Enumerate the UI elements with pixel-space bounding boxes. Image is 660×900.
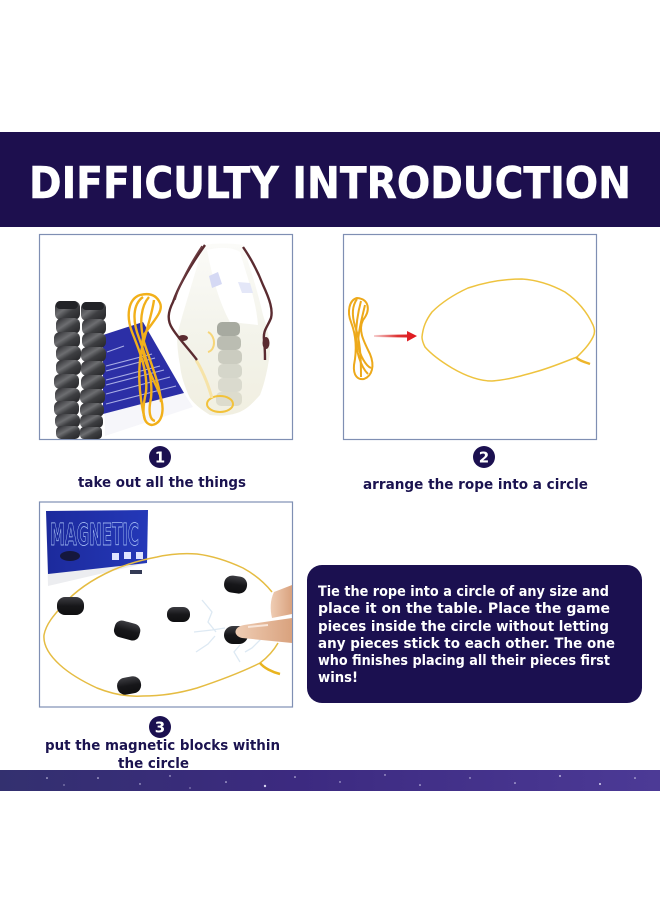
rules callout: place it on the table. Place the game — [318, 601, 610, 617]
panel: step 3 photo — [40, 502, 292, 707]
title banner — [0, 132, 660, 227]
red arrow — [374, 331, 417, 342]
step 3 caption: put the magnetic blocks within — [45, 738, 280, 754]
rope circle — [422, 279, 594, 381]
rules callout: wins! — [318, 670, 358, 686]
coiled yellow rope — [129, 294, 163, 425]
magnets — [57, 575, 248, 696]
coiled rope — [349, 298, 372, 379]
step 3 number badge — [149, 716, 171, 738]
rope circle — [44, 554, 278, 696]
step 2 number badge — [473, 446, 495, 468]
rules callout: Tie the rope into a circle of any size and — [318, 584, 609, 600]
rules callout: who finishes placing all their pieces first — [318, 653, 610, 669]
step 3 caption: the circle — [118, 756, 189, 772]
magnet stacks — [54, 301, 106, 439]
magnetic sparks — [194, 600, 262, 662]
panel: step 1 photo — [40, 234, 292, 440]
instruction booklet — [103, 322, 193, 436]
game box — [46, 510, 148, 586]
step 3 caption — [45, 738, 280, 772]
rope knot — [576, 357, 590, 364]
step 1 number badge — [149, 446, 171, 468]
rules callout: any pieces stick to each other. The one — [318, 636, 615, 652]
step 3 number badge: 3 — [155, 718, 165, 736]
rules callout — [307, 565, 642, 703]
game box: MAGNETIC — [50, 518, 139, 553]
step 1 caption: take out all the things — [78, 475, 246, 491]
drawstring bag — [169, 244, 272, 416]
starry footer band — [0, 770, 660, 791]
step 2 number badge: 2 — [479, 448, 489, 466]
step 2 caption: arrange the rope into a circle — [363, 477, 588, 493]
rope knot — [260, 663, 280, 674]
step 1 number badge: 1 — [155, 448, 165, 466]
panel: step 2 photo — [344, 234, 596, 440]
rules callout: pieces inside the circle without letting — [318, 619, 609, 635]
pointing hand — [235, 585, 292, 643]
